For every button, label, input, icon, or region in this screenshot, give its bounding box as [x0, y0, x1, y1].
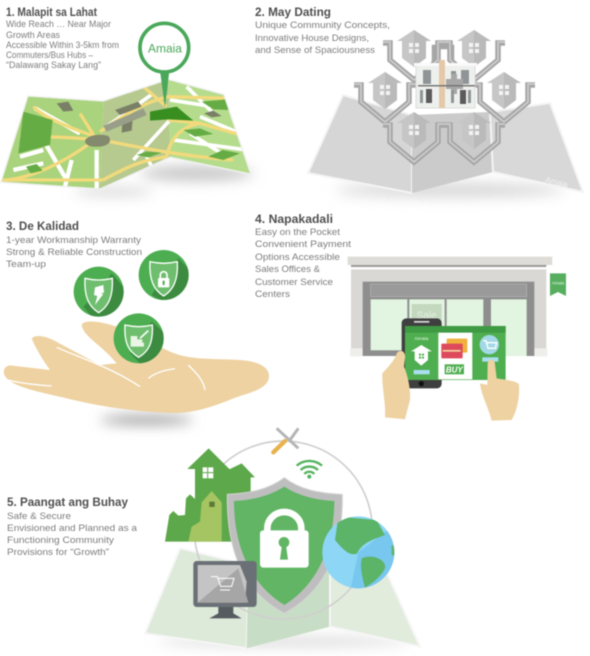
section 1 text: Malapit sa Lahat: Growth Areas: [6, 30, 60, 41]
connector line between top houses: [434, 47, 452, 65]
section 3 text: De Kalidad: 1-year Workmanship Warranty: [6, 235, 141, 246]
section 2 text: May Dating: Unique Community Concepts,: [255, 20, 390, 31]
tablet screen: Amaia: [414, 336, 429, 342]
section 3 text: De Kalidad: Strong & Reliable Construction: [6, 247, 142, 258]
section 1 text: Malapit sa Lahat: Commuters/Bus Hubs –: [6, 50, 94, 61]
house: middle right: [473, 72, 535, 122]
section 4 text: Napakadali: Easy on the Pocket: [255, 227, 340, 238]
globe: [322, 516, 397, 592]
section 1 text: Malapit sa Lahat: “Dalawang Sakay Lang”: [6, 60, 101, 71]
tablet screen: BUY: [446, 365, 463, 374]
section 2 text: May Dating: Innovative House Designs,: [255, 33, 369, 44]
hanging green Amaia tag: [550, 273, 566, 296]
large grey ring: [194, 441, 372, 619]
section 3 text: De Kalidad: Team-up: [6, 259, 46, 270]
house: bottom right: [443, 112, 505, 162]
section 1 text: Malapit sa Lahat: Accessible Within 3-5km from: [6, 40, 119, 51]
right hand pointing: [480, 360, 519, 421]
section 5 text: Paangat ang Buhay: Provisions for “Growth”: [7, 547, 109, 558]
section 5 text: Paangat ang Buhay: Functioning Community: [7, 535, 114, 546]
section 4 text: Napakadali: Options Accessible: [255, 252, 340, 263]
section 1 text: Malapit sa Lahat: [6, 7, 119, 71]
section 2 text: May Dating: [255, 7, 390, 56]
illustration: grey pop-up map with houses: Amaia: [545, 175, 569, 190]
section 4 text: Napakadali: Convenient Payment: [255, 239, 351, 250]
illustration: security shield, houses, globe and map: [145, 428, 420, 648]
house: bottom left: [383, 112, 445, 162]
section 1 text: Malapit sa Lahat: 1. Malapit sa Lahat: [6, 7, 97, 19]
section 5 text: Paangat ang Buhay: 5. Paangat ang Buhay: [7, 497, 129, 509]
smartphone: [402, 318, 442, 388]
house: top right: [443, 30, 505, 80]
shield with padlock: [227, 478, 342, 613]
illustration: storefront with tablet and hands: [348, 257, 566, 421]
section 5 text: Paangat ang Buhay: [7, 497, 138, 558]
section 1 text: Malapit sa Lahat: Wide Reach … Near Major: [6, 19, 111, 30]
left hand: [382, 351, 410, 419]
badge: lock shield: [139, 250, 192, 303]
section 4 text: Napakadali: Customer Service: [255, 277, 333, 288]
icon: Amaia location pin: [140, 23, 189, 107]
hanging green Amaia tag: Amaia: [552, 281, 565, 286]
icon: wrench and screwdriver: [273, 428, 298, 452]
badge: strength shield: [72, 266, 124, 318]
icon: Amaia location pin: Amaia: [148, 41, 182, 55]
section 3 text: De Kalidad: 3. De Kalidad: [6, 221, 79, 233]
illustration: folded city map with Amaia pin: [0, 80, 253, 196]
section 4 text: Napakadali: Centers: [255, 289, 290, 300]
pale green folded map: [145, 548, 420, 648]
house: middle left: [354, 72, 416, 122]
illustration: open hand with three shield badges: [4, 250, 269, 424]
computer monitor with shopping cart: [193, 561, 257, 618]
section 5 text: Paangat ang Buhay: Envisioned and Planned as a: [7, 523, 138, 534]
section 4 text: Napakadali: 4. Napakadali: [255, 214, 333, 226]
section 2 text: May Dating: and Sense of Spaciousness: [255, 45, 375, 56]
center townhouse: [414, 60, 477, 108]
icon: wifi signal: [297, 461, 322, 479]
section 2 text: May Dating: 2. May Dating: [255, 7, 331, 19]
storefront: [348, 257, 552, 356]
illustration: grey pop-up map with houses: [308, 30, 583, 196]
house: top left: [383, 30, 445, 80]
section 5 text: Paangat ang Buhay: Safe & Secure: [7, 511, 71, 522]
tablet screen: [405, 326, 506, 380]
section 4 text: Napakadali: [255, 214, 351, 300]
dark green and lime houses: [165, 448, 255, 542]
storefront: Sale: [417, 310, 437, 321]
section 3 text: De Kalidad: [6, 221, 142, 270]
badge: construction shield: [114, 313, 167, 367]
section 4 text: Napakadali: Sales Offices &: [255, 264, 321, 275]
